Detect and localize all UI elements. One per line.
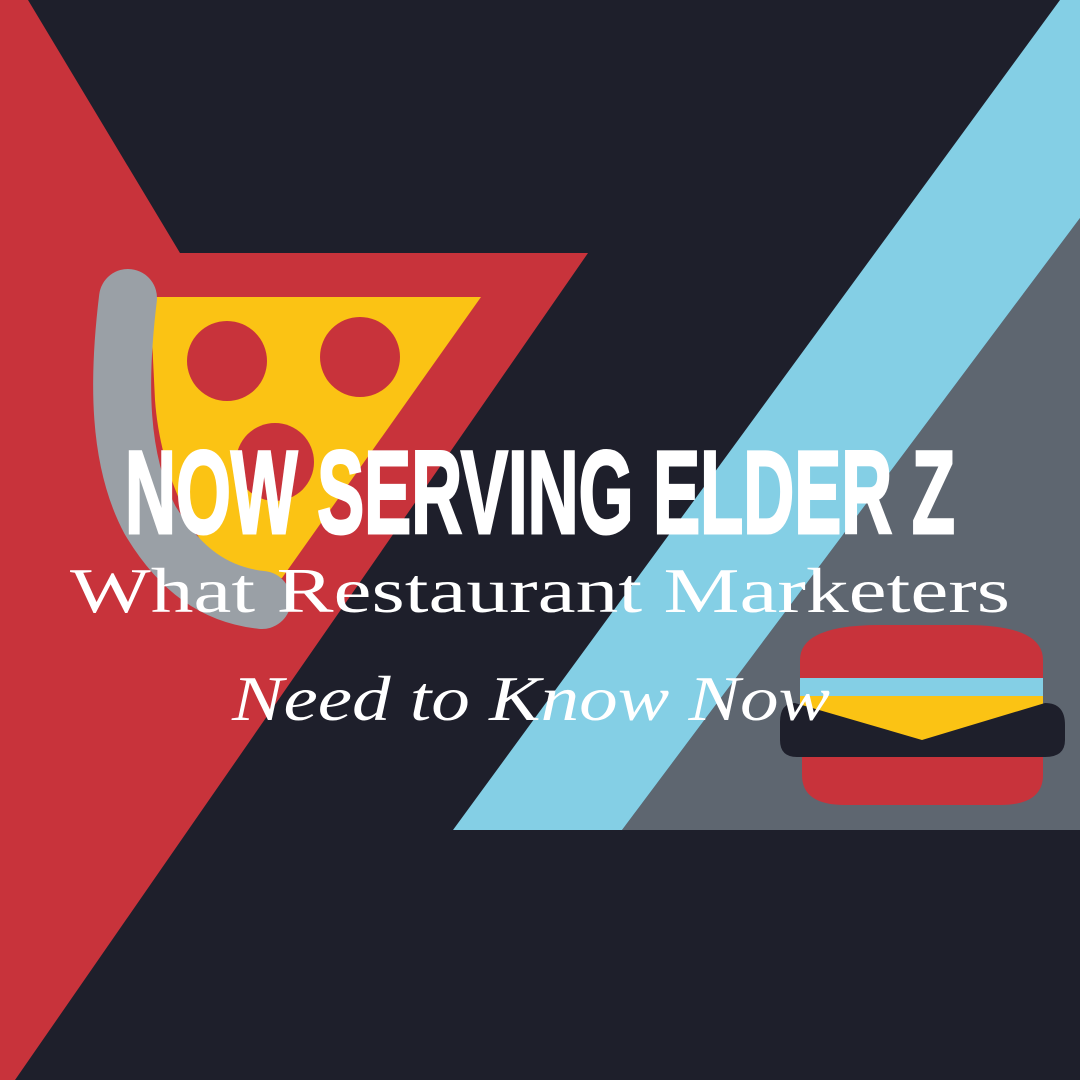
blue diagonal band: [453, 0, 1080, 830]
subtitle line 2: Need to Know Now: [231, 663, 830, 734]
gray triangle background: [622, 218, 1080, 830]
icon: burger: [780, 625, 1065, 805]
subtitle line 1: What Restaurant Marketers: [70, 555, 1010, 626]
icon: pizza slice: [122, 297, 481, 600]
red triangle shape: [0, 0, 588, 1080]
